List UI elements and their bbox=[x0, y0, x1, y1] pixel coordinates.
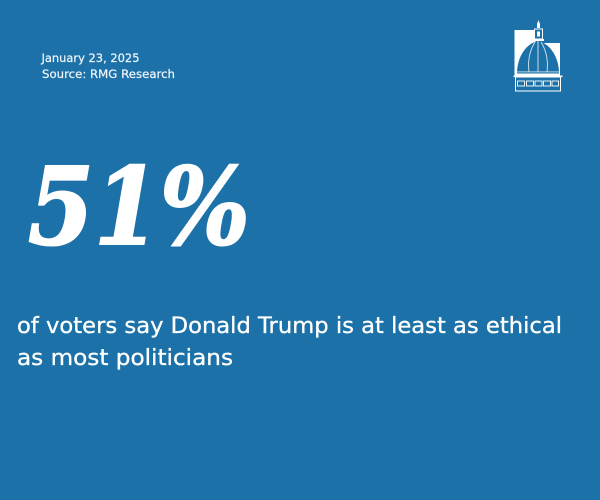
description text bbox=[17, 314, 562, 371]
headline percentage: 51% bbox=[28, 145, 250, 270]
date and source text: Source: RMG Research bbox=[42, 67, 175, 81]
date and source text bbox=[41, 51, 175, 81]
icon: capitol dome logo bbox=[514, 20, 562, 91]
date and source text: January 23, 2025 bbox=[41, 51, 140, 65]
description text: as most politicians bbox=[17, 346, 233, 371]
description text: of voters say Donald Trump is at least as ethical bbox=[17, 314, 562, 339]
